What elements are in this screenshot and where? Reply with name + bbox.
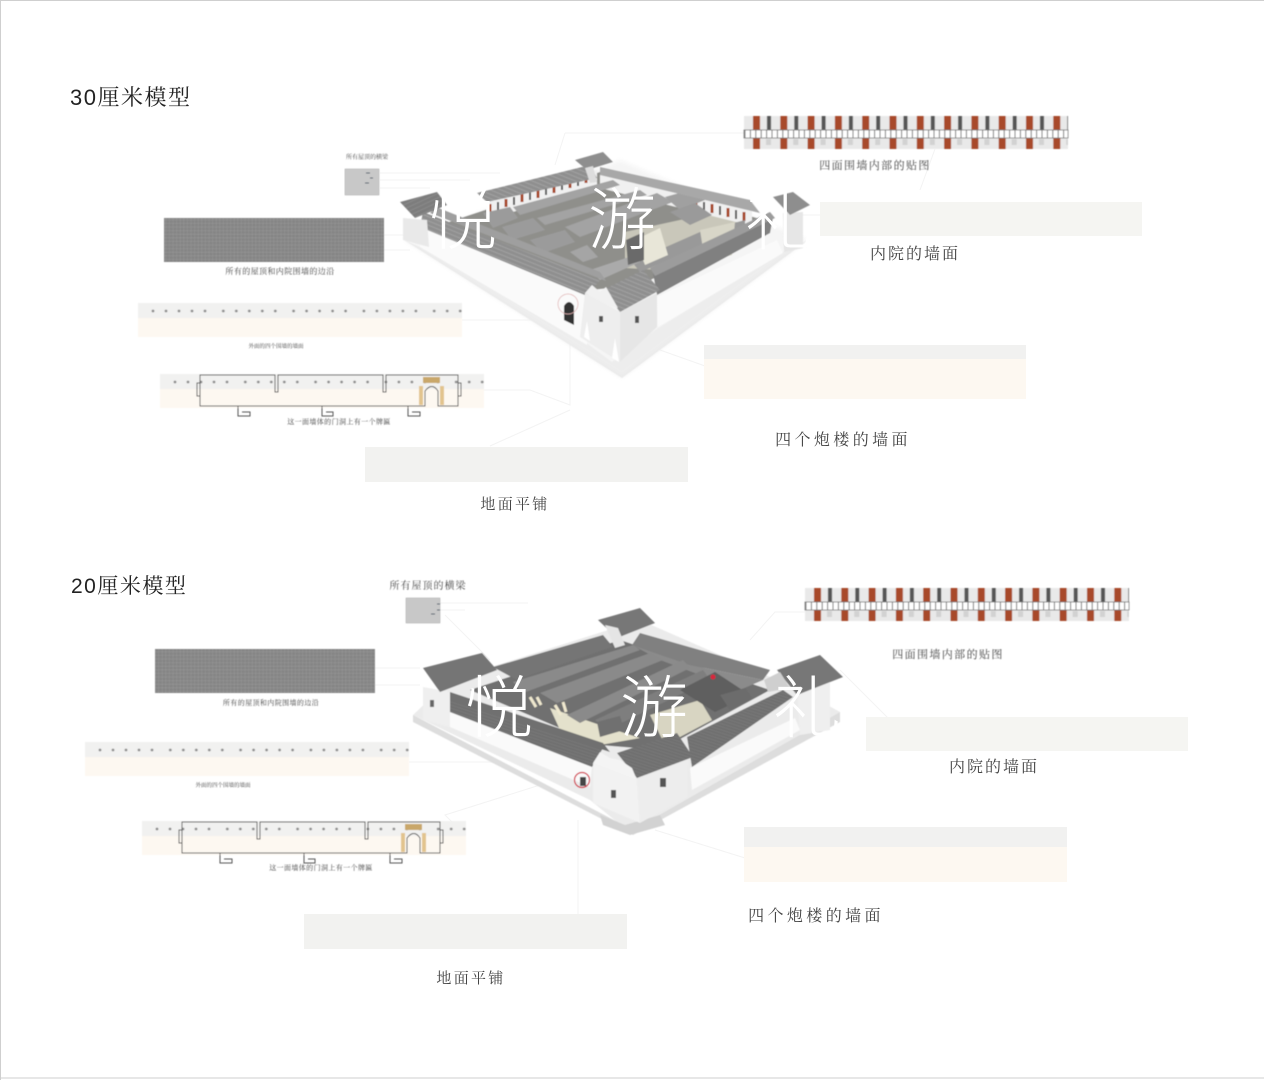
panel: courtyard wall 20cm xyxy=(866,717,1188,776)
watermark: 20cm model: 游 xyxy=(620,671,688,747)
right tower xyxy=(797,680,830,735)
panel: outer wall strip 30cm: 外面的四个围墙的墙面 xyxy=(248,342,304,350)
top tower xyxy=(575,152,613,170)
heading: 20cm model: 20厘米模型 xyxy=(71,575,187,598)
watermark: 20cm model xyxy=(465,671,841,747)
panel: outer wall strip 20cm: 外面的四个围墙的墙面 xyxy=(195,781,251,789)
panel: inner wall texture 20cm xyxy=(805,588,1129,661)
panel: outer wall strip 20cm xyxy=(85,742,409,789)
panel: roof beam swatch 30cm: 所有屋顶的横梁 xyxy=(346,153,389,161)
inner wall with red panels xyxy=(487,170,597,220)
front left wall xyxy=(420,227,587,345)
watermark: 30cm model: 游 xyxy=(588,183,656,259)
panel: inner wall texture 20cm: 四面围墙内部的贴图 xyxy=(892,647,1004,661)
front right wall xyxy=(657,240,783,327)
panel: ground paving 20cm xyxy=(304,914,627,987)
panel: 20cm model leader lines xyxy=(375,603,890,940)
left tower xyxy=(423,687,450,727)
panel: roof edge tile swatch 30cm xyxy=(164,218,384,276)
inner long roofs xyxy=(513,645,640,693)
front tower xyxy=(593,763,640,823)
front left wall xyxy=(450,712,592,787)
panel: roof edge tile swatch 30cm: 所有的屋顶和内院围墙的边沿 xyxy=(225,266,335,276)
panel: ground paving 20cm: 地面平铺 xyxy=(436,969,506,987)
panel: tower wall 20cm: 四个炮楼的墙面 xyxy=(748,907,884,925)
watermark: 20cm model: 礼 xyxy=(773,671,841,747)
front tower xyxy=(580,293,620,362)
heading: 30cm model: 30厘米模型 xyxy=(70,85,191,110)
panel: 30cm model leader lines xyxy=(380,133,935,446)
panel: outer wall strip 30cm xyxy=(138,303,462,350)
watermark: 30cm model: 悦 xyxy=(429,183,497,259)
panel: roof beam swatch 30cm xyxy=(345,153,389,195)
panel: inner wall texture 30cm xyxy=(744,116,1068,172)
panel: courtyard wall 20cm: 内院的墙面 xyxy=(949,758,1039,776)
panel: ground paving 30cm xyxy=(365,447,688,513)
back walls roofs xyxy=(477,165,597,202)
panel: courtyard wall 30cm: 内院的墙面 xyxy=(870,245,960,263)
courtyard floor xyxy=(440,172,770,290)
panel: roof beam swatch 20cm xyxy=(390,579,466,623)
base feet xyxy=(600,815,665,835)
base slab xyxy=(413,620,840,835)
ground slab xyxy=(404,240,808,378)
top tower xyxy=(598,608,655,638)
front right wall xyxy=(690,718,800,790)
back roofs xyxy=(493,635,613,680)
courtyard floor xyxy=(470,640,770,750)
beam ends xyxy=(530,697,566,715)
panel: roof edge tile swatch 20cm xyxy=(155,649,375,707)
panel: tower wall 20cm xyxy=(744,827,1067,925)
panel: tower wall 30cm xyxy=(704,345,1026,449)
panel: roof edge tile swatch 20cm: 所有的屋顶和内院围墙的边沿 xyxy=(223,698,319,707)
red circled gate xyxy=(580,777,586,786)
panel: roof beam swatch 20cm: 所有屋顶的横梁 xyxy=(390,579,466,592)
gate xyxy=(564,302,574,325)
diagram: 20cm model building xyxy=(413,608,843,835)
left tower xyxy=(403,218,429,247)
watermark: 30cm model: 礼 xyxy=(745,183,813,259)
diagram: 30cm model building xyxy=(400,152,810,378)
right tower xyxy=(783,212,803,252)
panel: door wall strip 20cm xyxy=(142,821,466,872)
panel: door wall strip 30cm xyxy=(160,374,484,426)
panel: tower wall 30cm: 四个炮楼的墙面 xyxy=(775,431,911,449)
panel: inner wall texture 30cm: 四面围墙内部的贴图 xyxy=(819,158,931,172)
watermark: 20cm model: 悦 xyxy=(465,671,533,747)
panel: door wall strip 20cm: 这一面墙体的门洞上有一个牌匾 xyxy=(269,863,373,872)
panel: ground paving 30cm: 地面平铺 xyxy=(480,495,550,513)
inner roofs xyxy=(513,180,620,215)
watermark: 30cm model xyxy=(429,183,813,259)
panel: courtyard wall 30cm xyxy=(820,202,1142,263)
panel: door wall strip 30cm: 这一面墙体的门洞上有一个牌匾 xyxy=(287,417,391,426)
